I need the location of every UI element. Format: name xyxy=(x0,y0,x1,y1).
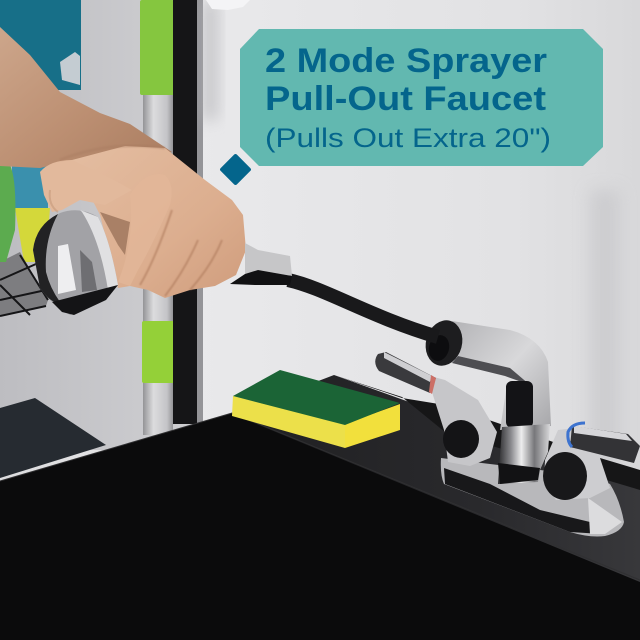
white glove at top xyxy=(206,0,250,10)
chrome sprayer head xyxy=(33,210,118,315)
heading line two: Pull-Out Faucet xyxy=(265,80,546,118)
sprayer grip seen between thumb and fingers xyxy=(100,212,130,255)
subheading: (Pulls Out Extra 20") xyxy=(265,123,551,153)
icon: diamond accent xyxy=(219,153,252,186)
right handle xyxy=(570,426,640,463)
hose connector xyxy=(230,243,292,285)
black wall post xyxy=(173,0,197,424)
sink rim counter xyxy=(232,375,640,582)
deck plate xyxy=(441,458,624,536)
callout: title panel xyxy=(240,29,603,166)
fingers over the sprayer xyxy=(40,146,222,296)
hand xyxy=(72,146,246,298)
right knob xyxy=(544,428,610,500)
black sink xyxy=(0,375,640,640)
finger creases xyxy=(118,174,172,286)
hose collar xyxy=(421,316,467,370)
shelf with bottles xyxy=(0,0,81,316)
panel background xyxy=(240,29,603,166)
green-grip pole xyxy=(140,0,176,435)
spray hose xyxy=(288,280,438,337)
heading line one: 2 Mode Sprayer xyxy=(265,42,547,80)
spout base xyxy=(498,424,550,484)
arm xyxy=(0,27,246,298)
dark cloth lower left xyxy=(0,398,106,478)
spout xyxy=(452,321,551,430)
sponge xyxy=(232,370,400,448)
left handle xyxy=(430,376,497,466)
thumb xyxy=(40,160,132,212)
faucet xyxy=(375,316,640,536)
